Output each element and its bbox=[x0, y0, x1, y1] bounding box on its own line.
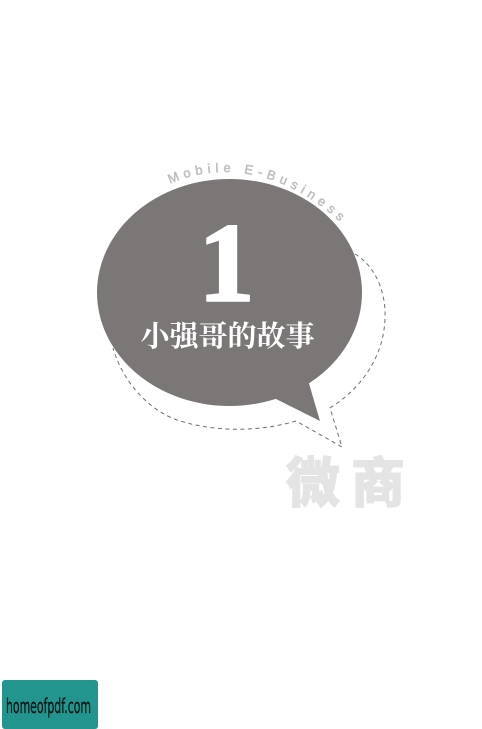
site badge bbox=[2, 680, 98, 729]
watermark heading: 微商 bbox=[286, 454, 405, 514]
speech bubble bbox=[97, 179, 362, 421]
site badge: homeofpdf.com bbox=[6, 694, 91, 718]
curved subtitle: Mobile E-Business bbox=[167, 162, 344, 221]
dashed bubble outline bbox=[113, 254, 385, 447]
chapter title: 小强哥的故事 bbox=[140, 320, 315, 353]
chapter number: 1 bbox=[198, 202, 254, 326]
